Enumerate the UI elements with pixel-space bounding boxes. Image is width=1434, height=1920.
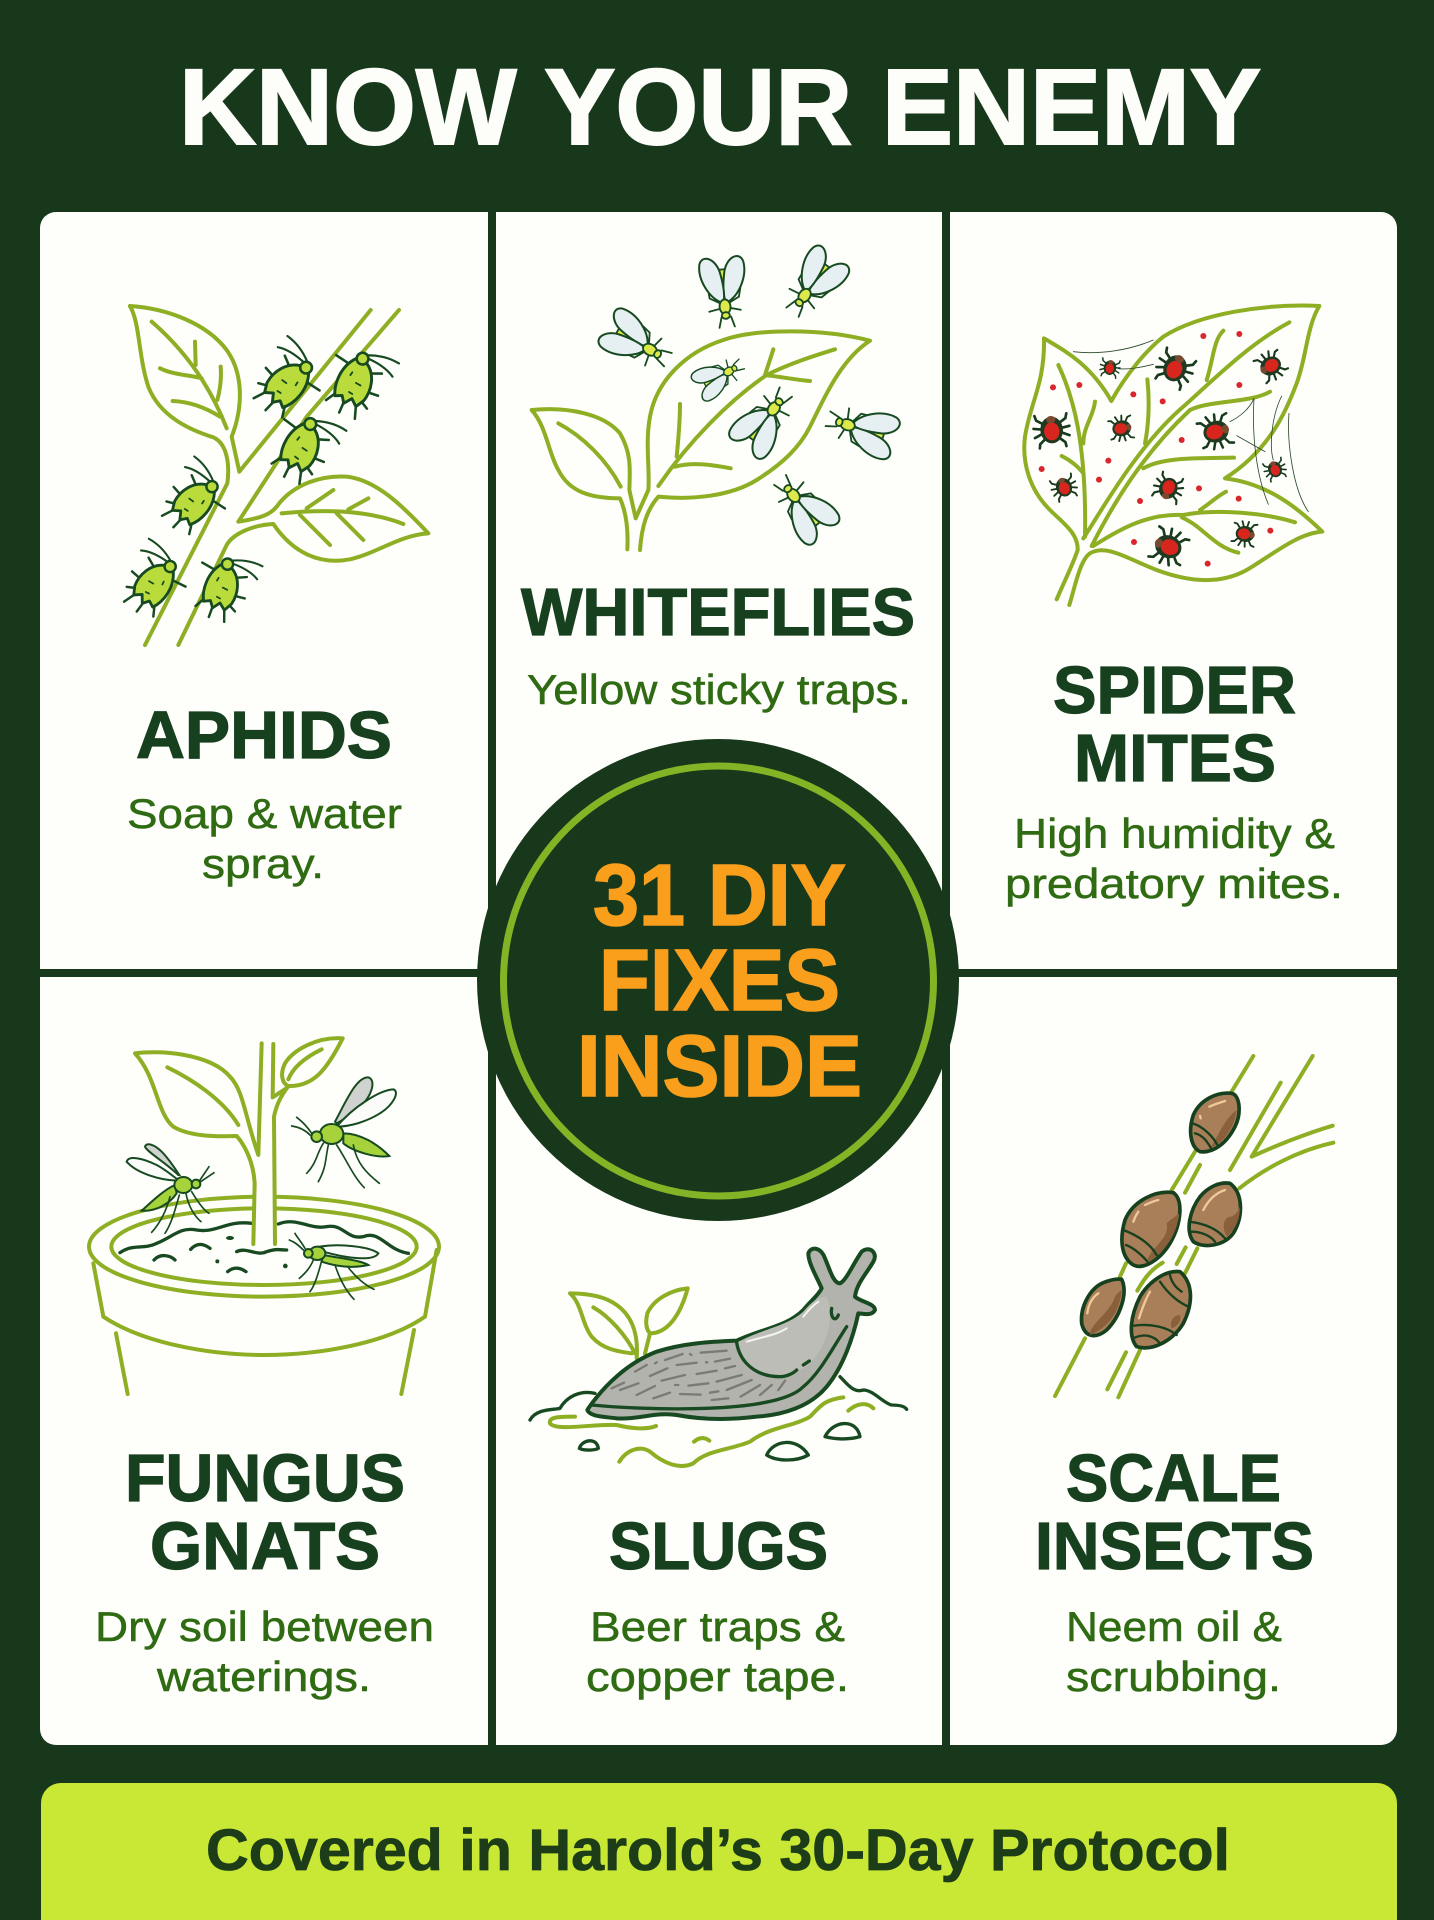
heading: slugs: SLUGS xyxy=(609,1509,828,1584)
banner background xyxy=(41,1783,1397,1920)
illustration: fungus gnats over a plant pot xyxy=(89,1038,439,1394)
heading: fungus gnats: GNATS xyxy=(150,1509,380,1584)
heading: aphids: APHIDS xyxy=(136,698,392,773)
card: scale insects xyxy=(950,977,1397,1745)
panel: fungus gnats xyxy=(40,977,488,1745)
text: slugs fix: copper tape. xyxy=(586,1653,849,1700)
badge ring xyxy=(504,766,934,1196)
heading: fungus gnats: FUNGUS xyxy=(125,1441,405,1516)
heading: spider mites xyxy=(1053,653,1296,796)
illustration: scale insects on a stem xyxy=(1055,1056,1333,1397)
panel: whiteflies xyxy=(496,212,942,969)
badge circle xyxy=(477,739,959,1221)
text: scale insects fix xyxy=(1066,1603,1282,1700)
illustration: spider mites on a leaf xyxy=(1024,306,1322,605)
card: spider mites xyxy=(950,212,1397,969)
card: aphids xyxy=(40,212,488,969)
text: fungus gnats fix: Dry soil between xyxy=(95,1603,434,1650)
text: spider mites fix: High humidity & xyxy=(1014,810,1335,857)
card: whiteflies xyxy=(496,212,942,969)
card: fungus gnats xyxy=(40,977,488,1745)
gnat on soil xyxy=(289,1233,378,1299)
panel: spider mites xyxy=(950,212,1397,969)
heading: fungus gnats xyxy=(125,1441,405,1584)
center badge xyxy=(477,739,959,1221)
title: KNOW YOUR ENEMY xyxy=(179,46,1261,167)
illustration: aphids on a stem xyxy=(109,306,428,645)
badge text: 31 DIY xyxy=(593,847,846,944)
heading: scale insects: SCALE xyxy=(1066,1441,1281,1516)
heading: spider mites: MITES xyxy=(1074,721,1276,796)
banner text: Covered in Harold’s 30-Day Protocol xyxy=(206,1818,1230,1883)
text: aphids fix xyxy=(127,790,402,887)
heading: whiteflies: WHITEFLIES xyxy=(521,575,915,650)
text: scale insects fix: scrubbing. xyxy=(1066,1653,1281,1700)
illustration: whiteflies around a leaf xyxy=(532,242,902,550)
panel: scale insects xyxy=(950,977,1397,1745)
text: spider mites fix xyxy=(1005,810,1343,907)
text: fungus gnats fix: waterings. xyxy=(156,1653,371,1700)
panel: slugs xyxy=(496,977,942,1745)
heading: scale insects: INSECTS xyxy=(1035,1509,1314,1584)
badge text: FIXES xyxy=(599,932,840,1029)
text: fungus gnats fix xyxy=(95,1603,434,1700)
gnat left xyxy=(127,1144,214,1233)
text: aphids fix: Soap & water xyxy=(127,790,402,837)
illustration: slug on soil xyxy=(530,1249,907,1466)
text: scale insects fix: Neem oil & xyxy=(1066,1603,1282,1650)
text: slugs fix: Beer traps & xyxy=(590,1603,845,1650)
heading: spider mites: SPIDER xyxy=(1053,653,1296,728)
text: spider mites fix: predatory mites. xyxy=(1005,860,1343,907)
text: slugs fix xyxy=(586,1603,849,1700)
badge text: INSIDE xyxy=(577,1018,862,1115)
text: aphids fix: spray. xyxy=(202,840,324,887)
heading: scale insects xyxy=(1035,1441,1314,1584)
badge text xyxy=(577,847,862,1115)
bottom banner xyxy=(41,1783,1397,1920)
card: slugs xyxy=(496,977,942,1745)
gnat top right xyxy=(292,1077,396,1188)
panel: aphids xyxy=(40,212,488,969)
text: whiteflies fix: Yellow sticky traps. xyxy=(527,666,911,713)
